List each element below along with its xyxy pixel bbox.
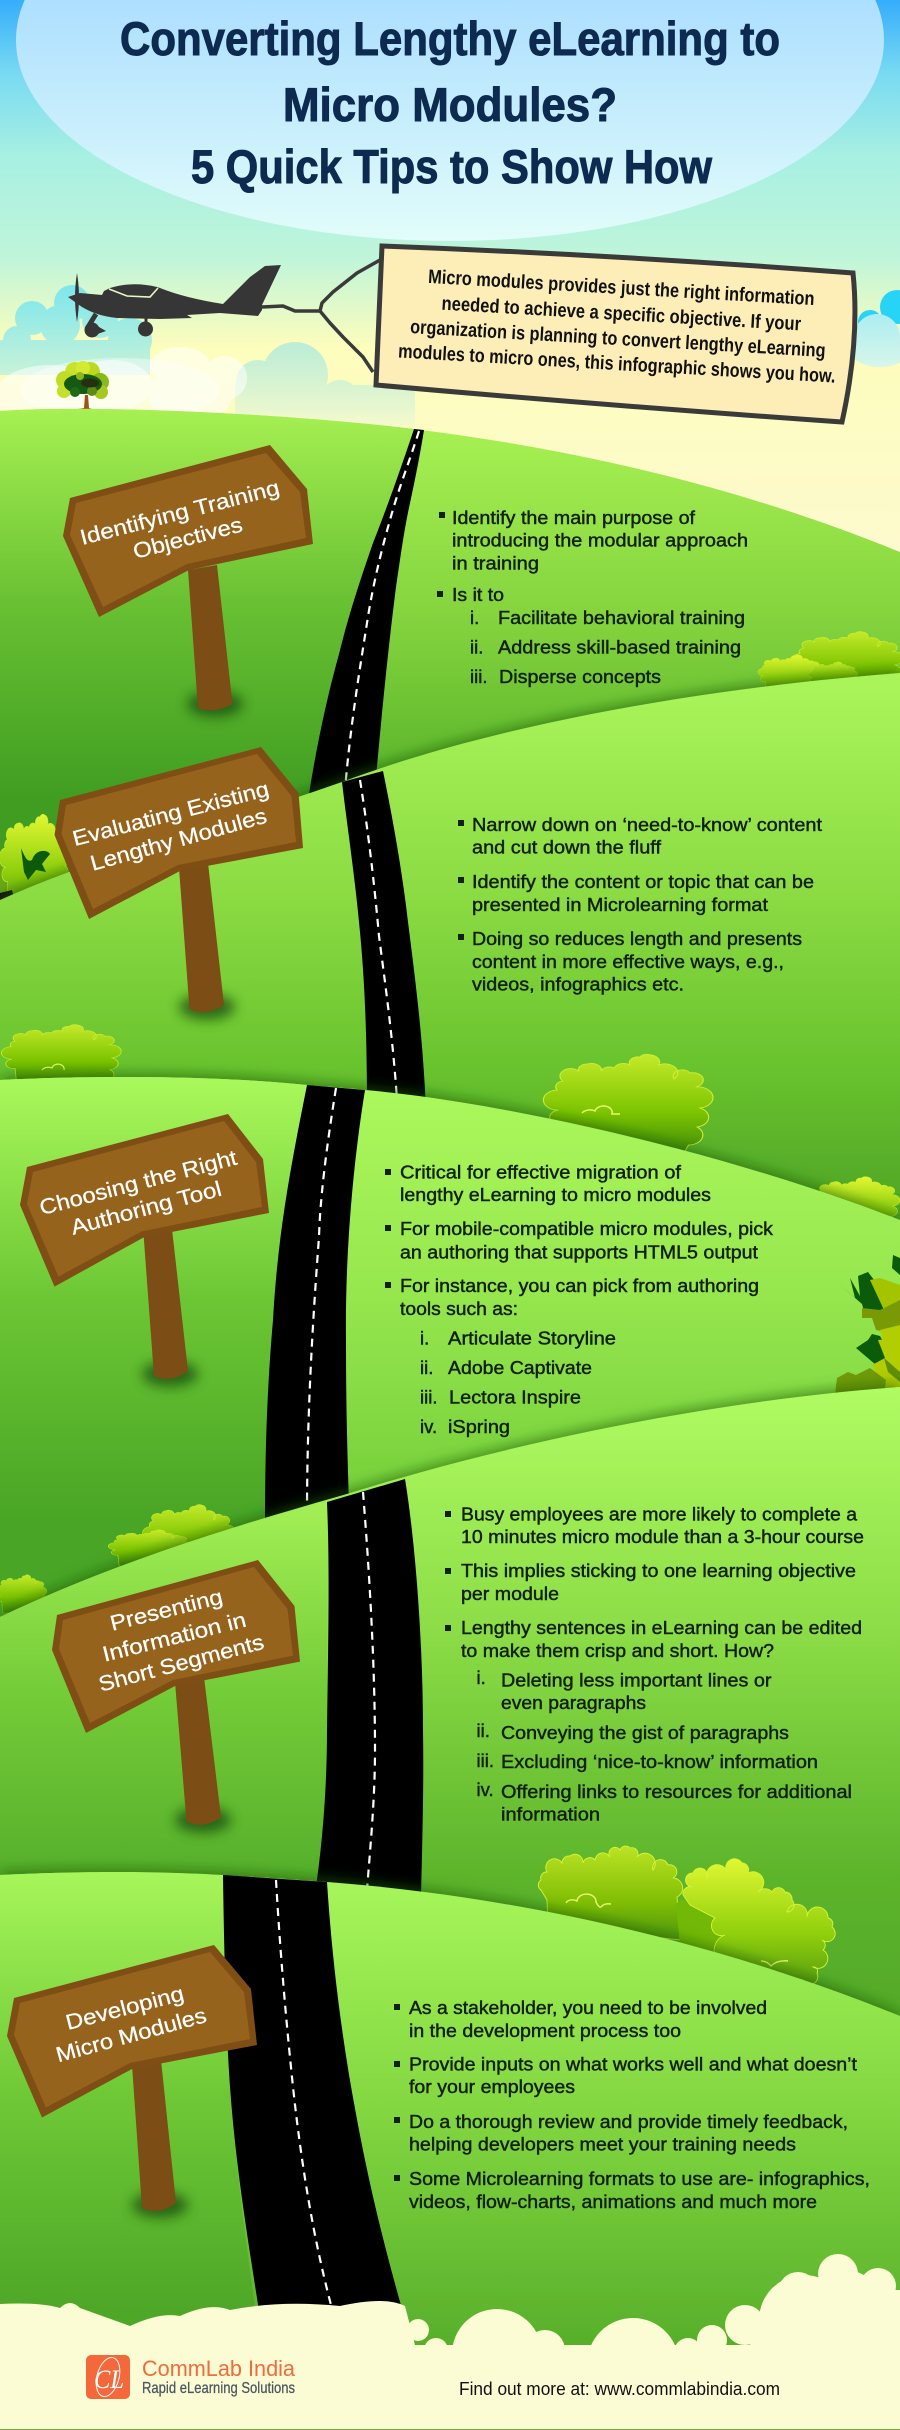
section 4 text: Offering links to resources for additional: [501, 1781, 852, 1802]
road 2 centre line: [360, 780, 397, 1100]
section 2 text: content in more effective ways, e.g.,: [472, 951, 784, 972]
section 5 text: As a stakeholder, you need to be involved: [409, 1997, 767, 2018]
hill 2: [0, 673, 900, 1300]
section 4 text: Deleting less important lines or: [501, 1670, 772, 1690]
road 1 centre line: [345, 431, 419, 790]
section 5 text: Some Microlearning formats to use are- infographics,: [409, 2168, 870, 2189]
signpost 5: Developing: [63, 1982, 186, 2035]
signpost 2: Evaluating Existing: [70, 777, 271, 851]
section 4 text: per module: [461, 1583, 559, 1604]
section 1 text: introducing the modular approach: [452, 530, 748, 550]
footer line: [0, 2429, 900, 2430]
section 4 text: 10 minutes micro module than a 3-hour course: [461, 1526, 864, 1547]
section 4 text: Excluding ‘nice-to-know’ information: [501, 1751, 818, 1772]
signpost 3: [20, 1114, 269, 1387]
section 3 text: Adobe Captivate: [448, 1357, 592, 1378]
hill 3: [0, 1077, 900, 1660]
signpost 2: Lengthy Modules: [88, 804, 270, 876]
section 1 text: Is it to: [452, 584, 504, 605]
section 4 text: even paragraphs: [501, 1692, 646, 1713]
title: [120, 12, 780, 193]
section 4 text: information: [501, 1804, 600, 1824]
section 1 text: Address skill-based training: [498, 636, 741, 658]
section 3 text: For instance, you can pick from authoring: [400, 1275, 759, 1296]
section 3 text: an authoring that supports HTML5 output: [400, 1242, 758, 1262]
signpost 5: [7, 1945, 257, 2218]
section 1 text: in training: [452, 552, 539, 574]
road 4: [314, 1479, 423, 1900]
road 2: [342, 771, 426, 1110]
section 1 text: i.: [470, 607, 479, 628]
road 1: [308, 429, 424, 800]
road 3 centre line: [307, 1088, 336, 1515]
title: 5 Quick Tips to Show How: [191, 140, 712, 193]
road 5: [223, 1875, 408, 2330]
title: Converting Lengthy eLearning to: [120, 12, 780, 65]
signpost 4: Presenting: [108, 1585, 225, 1636]
bushes behind hill 3: [1, 1025, 900, 1232]
airplane: [68, 265, 281, 338]
road 4 centre line: [363, 1492, 375, 1890]
banner: [376, 246, 855, 422]
tow rope: [262, 260, 380, 372]
section 1 text: iii.: [470, 666, 487, 687]
section 4 text: i.: [476, 1667, 486, 1688]
section 4 text: ii.: [476, 1720, 490, 1741]
section 2 text: and cut down the fluff: [472, 836, 662, 858]
footer cloud: [0, 2254, 900, 2430]
section 1 text: Facilitate behavioral training: [498, 607, 745, 628]
section 3 text: Critical for effective migration of: [400, 1162, 682, 1182]
section 5 text: in the development process too: [409, 2020, 681, 2041]
hill 4: [0, 1387, 900, 2100]
section 4 text: Conveying the gist of paragraphs: [501, 1722, 789, 1743]
section 4 text: iv.: [476, 1779, 494, 1800]
logo: CL: [94, 2365, 124, 2394]
section 1 text: Identify the main purpose of: [452, 507, 696, 528]
signpost 5: Micro Modules: [53, 2003, 209, 2067]
footer link: Find out more at: www.commlabindia.com: [459, 2379, 780, 2399]
section 2 text: [458, 814, 822, 994]
logo: Rapid eLearning Solutions: [142, 2380, 295, 2397]
banner: organization is planning to convert lengthy eLearning: [410, 316, 826, 362]
section 2 text: Doing so reduces length and presents: [472, 928, 802, 949]
signpost 1: Objectives: [131, 513, 245, 564]
section 3 text: Lectora Inspire: [449, 1386, 581, 1408]
tree: [56, 361, 109, 411]
hill 5 left shade: [0, 1872, 258, 2330]
signpost 4: [52, 1560, 300, 1833]
signpost 1: Identifying Training: [77, 476, 282, 550]
title cloud: [16, 0, 884, 241]
section 5 text: helping developers meet your training needs: [409, 2134, 796, 2154]
section 4 text: to make them crisp and short. How?: [461, 1640, 774, 1661]
section 3 text: tools such as:: [400, 1298, 518, 1319]
hill 1: [0, 409, 900, 900]
logo: CommLab India: [142, 2356, 296, 2381]
section 3 text: iv.: [420, 1416, 437, 1437]
title: Micro Modules?: [283, 78, 617, 131]
section 1 text: [437, 507, 748, 687]
signpost 3: Authoring Tool: [68, 1177, 224, 1240]
section 5 text: Provide inputs on what works well and what doesn’t: [409, 2054, 857, 2074]
section 2 text: Identify the content or topic that can be: [472, 871, 814, 892]
section 2 text: Narrow down on ‘need-to-know’ content: [472, 814, 822, 835]
section 5 text: [394, 1997, 870, 2212]
section 3 text: ii.: [420, 1357, 433, 1378]
banner: Micro modules provides just the right information: [428, 266, 815, 310]
bushes behind hill 2: [0, 632, 900, 910]
section 3 text: iSpring: [448, 1416, 510, 1437]
hill 4 left shade: [0, 1502, 327, 1900]
bushes behind hill 5: [538, 1846, 835, 1984]
right side plants: [835, 1255, 900, 1395]
bushes behind hill 4: [0, 1505, 235, 1613]
logo: [86, 2355, 296, 2399]
section 5 text: for your employees: [409, 2076, 575, 2097]
section 3 text: iii.: [420, 1386, 437, 1408]
signpost 1: [63, 445, 313, 717]
section 4 text: This implies sticking to one learning objective: [461, 1560, 856, 1581]
section 4 text: Lengthy sentences in eLearning can be edited: [461, 1617, 862, 1638]
section 1 text: Disperse concepts: [499, 666, 661, 687]
section 4 text: iii.: [476, 1750, 494, 1771]
section 4 text: Busy employees are more likely to complete a: [461, 1504, 858, 1524]
hill 3 left shade: [0, 1077, 307, 1660]
road 5 centre line: [276, 1880, 331, 2305]
clouds: [0, 285, 900, 425]
hill 5: [0, 1872, 900, 2430]
section 3 text: Articulate Storyline: [448, 1328, 616, 1348]
signpost 4: Information in: [100, 1608, 249, 1667]
section 4 text: [445, 1504, 864, 1824]
section 5 text: Do a thorough review and provide timely feedback,: [409, 2111, 848, 2132]
section 2 text: presented in Microlearning format: [472, 894, 768, 915]
section 3 text: i.: [420, 1328, 429, 1348]
section 5 text: videos, flow-charts, animations and much more: [409, 2191, 817, 2212]
road 3: [265, 1085, 365, 1530]
signpost 3: Choosing the Right: [37, 1146, 240, 1220]
signpost 4: Short Segments: [96, 1630, 266, 1697]
signpost 2: [54, 747, 303, 1020]
section 3 text: [385, 1162, 774, 1437]
section 3 text: lengthy eLearning to micro modules: [400, 1184, 711, 1205]
hill 1 left shade: [0, 409, 414, 930]
section 1 text: ii.: [470, 636, 483, 658]
sky background: [0, 0, 900, 560]
section 3 text: For mobile-compatible micro modules, pick: [400, 1218, 774, 1239]
banner: needed to achieve a specific objective. If your: [441, 293, 802, 335]
section 2 text: videos, infographics etc.: [472, 974, 684, 994]
